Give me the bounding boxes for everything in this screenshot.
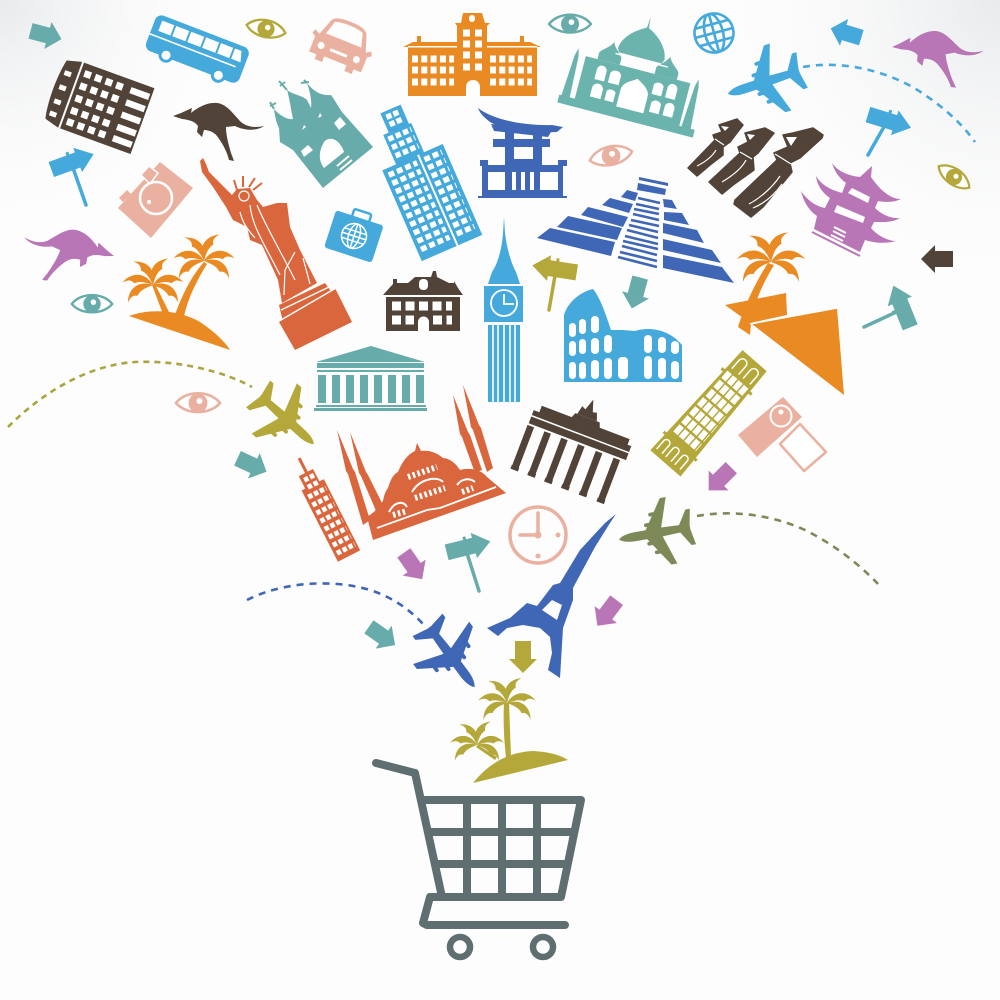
moai statues [688,119,823,217]
eye: pink left [176,393,220,412]
arrow: dark right [921,245,953,273]
dashed flight path: left [8,362,252,427]
island with two palms: orange [122,230,235,350]
eye: pink centre [588,142,634,170]
arrow: purple right [699,458,741,500]
arrow: teal lower [361,615,403,657]
clock tower [484,217,523,402]
arrow: teal top left [27,17,65,53]
shopping cart [376,763,581,957]
pagoda [801,163,901,256]
arrow: purple lower left [392,545,434,587]
suitcase with globe [324,204,386,263]
arrow: teal centre [618,274,654,312]
small tower: red [288,452,360,562]
signpost: blue right [864,102,915,155]
arrow: teal left [232,446,272,484]
arrow: purple lower right [586,592,628,634]
eye: olive right [934,159,974,194]
car [303,10,381,78]
globe [690,9,738,57]
eye: olive [245,16,287,41]
kangaroo: purple left [14,215,118,299]
parthenon [314,346,427,411]
signpost: olive [530,253,579,310]
bus [142,13,251,88]
mayan pyramid [537,177,734,283]
dashed flight path: right [697,513,878,584]
signpost: teal bottom [444,529,493,591]
brandenburg gate [510,381,642,506]
colosseum [564,289,682,382]
dashed flight path: top right [803,65,975,142]
dashed flight path: bottom [247,583,423,624]
building: dark hotel [41,56,154,154]
statue of liberty [200,158,352,350]
camera [118,162,193,238]
airplane: dark blue bottom [399,604,503,708]
pyramids and palm [725,227,844,395]
small house [383,271,463,331]
torii gate [478,108,567,198]
arrow: blue top right [827,15,865,51]
skyscraper: blue [361,95,482,261]
video camera [738,397,826,471]
wall clock [510,507,566,563]
building: orange palace [403,13,541,96]
church with onion domes [270,80,373,188]
kangaroo: dark [173,103,264,161]
leaning tower of pisa [649,346,771,478]
taj mahal [557,0,719,138]
airplane: green right [613,493,699,573]
eye: teal top [549,15,591,33]
airplane: blue top [717,37,813,127]
arrow: olive bottom [509,641,537,673]
island with palms: olive [450,674,568,783]
signpost: blue left [47,142,98,205]
mosque [337,385,506,540]
airplane: olive left [236,369,336,469]
signpost: teal right [864,281,922,332]
eye: teal left [72,295,112,313]
kangaroo: purple top right [891,28,986,92]
eiffel tower [487,514,616,678]
